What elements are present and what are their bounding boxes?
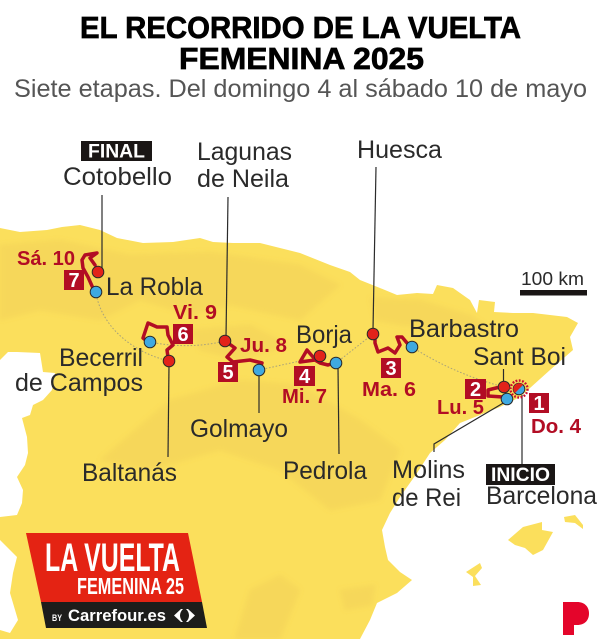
label: Borja: Borja (296, 321, 352, 349)
icon: Carrefour mark (174, 609, 195, 622)
stage 5 route: 5 (222, 362, 234, 384)
stage 7 route (17, 248, 104, 298)
title (80, 10, 521, 76)
title: EL RECORRIDO DE LA VUELTA (80, 10, 521, 45)
stage 5 route (218, 335, 287, 384)
label: Molins de Rei: Molins (392, 456, 465, 484)
scale bar (520, 269, 587, 296)
stage 3 route (362, 328, 418, 401)
label: final Cotobello: FINAL (88, 142, 145, 162)
label: final Cotobello (63, 141, 172, 191)
publisher logo: P (563, 602, 589, 635)
stage 3 route: 3 (385, 358, 397, 380)
stage 3 route: Ma. 6 (362, 379, 416, 401)
label: Golmayo: Golmayo (190, 415, 288, 443)
label: Molins de Rei (392, 456, 465, 512)
stage 5 route: Ju. 8 (240, 335, 287, 357)
label: Becerril de Campos: de Campos (15, 369, 143, 397)
stage 2 route: 2 (470, 379, 481, 401)
label: La Robla: La Robla (106, 273, 203, 301)
stage 7 route: Sá. 10 (17, 248, 75, 270)
label: final Cotobello: Cotobello (63, 163, 172, 191)
label: start Barcelona: Barcelona (486, 482, 597, 510)
label: Huesca: Huesca (357, 136, 442, 164)
label: Pedrola: Pedrola (283, 457, 367, 485)
stage 2 route (437, 379, 513, 419)
label: Lagunas de Neila: de Neila (197, 165, 289, 193)
logo: La Vuelta Femenina 25: BY (52, 613, 62, 623)
map of Spain (0, 225, 583, 639)
stage 6 route: 6 (177, 324, 189, 346)
label: start Barcelona: INICIO (491, 465, 550, 486)
label: Baltanas: Baltanás (82, 459, 177, 487)
logo: La Vuelta Femenina 25: FEMENINA 25 (77, 573, 184, 599)
stage 1 start marker: Do. 4 (531, 416, 582, 438)
stage 6 route: Vi. 9 (173, 302, 217, 324)
logo: La Vuelta Femenina 25 (26, 533, 207, 628)
logo: La Vuelta Femenina 25: Carrefour.es (68, 606, 166, 625)
stage 2 route: Lu. 5 (437, 397, 484, 419)
label: Becerril de Campos (15, 344, 143, 397)
leader lines (102, 167, 522, 464)
stage 4 route (282, 350, 342, 408)
logo: La Vuelta Femenina 25: LA VUELTA (45, 536, 180, 580)
label: Lagunas de Neila: Lagunas (197, 138, 292, 166)
label: start Barcelona (486, 464, 597, 510)
label: Molins de Rei: de Rei (392, 484, 461, 512)
stage 4 route: 4 (299, 366, 311, 388)
stage 6 route (143, 302, 217, 367)
stage connector dotted lines (97, 298, 504, 387)
label: Lagunas de Neila (197, 138, 292, 193)
label: Barbastro: Barbastro (409, 315, 519, 343)
stage 1 start marker (510, 380, 582, 438)
stage 7 route: 7 (68, 270, 80, 292)
label: Becerril de Campos: Becerril (59, 344, 143, 372)
scale bar: 100 km (521, 269, 584, 289)
title: FEMENINA 2025 (179, 41, 424, 76)
stage 4 route: Mi. 7 (282, 386, 327, 408)
subtitle: Siete etapas. Del domingo 4 al sábado 10 de mayo (14, 75, 587, 103)
stage 1 start marker: 1 (533, 393, 545, 415)
label: Sant Boi: Sant Boi (473, 343, 566, 371)
